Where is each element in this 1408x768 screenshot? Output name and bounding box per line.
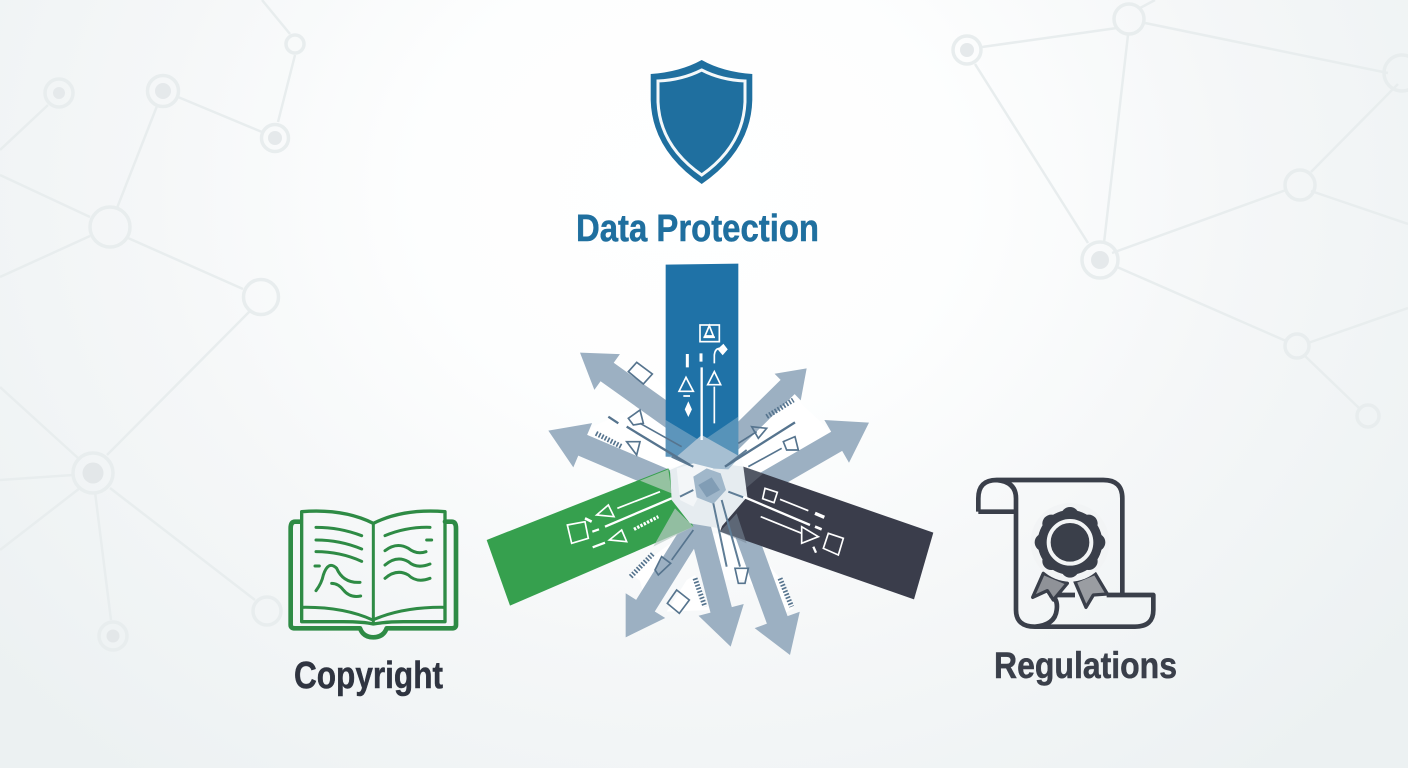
network pattern: left: [0, 0, 304, 650]
bar: dark: [720, 467, 933, 599]
label: Copyright: Copyright: [294, 655, 443, 697]
label: Regulations: Regulations: [994, 645, 1177, 686]
bar: green: [487, 468, 693, 606]
icon: open book: [291, 511, 456, 637]
translucent overlaps: [640, 417, 763, 547]
glyphs: green bar: [567, 492, 672, 547]
network pattern: right: [953, 0, 1408, 427]
icon: shield: [651, 60, 752, 184]
glyphs: strips: [596, 362, 798, 613]
glyphs: dark bar: [743, 488, 843, 555]
heading: Data Protection: Data Protection: [576, 208, 819, 250]
glyphs: blue bar: [679, 325, 727, 440]
white strips behind arrows: [586, 361, 833, 615]
central hub: [670, 435, 747, 567]
central arrow burst diagram: [487, 264, 933, 663]
bar: blue: [666, 264, 738, 457]
icon: certificate scroll: [978, 480, 1153, 627]
arrows radiating from centre: [539, 335, 881, 663]
